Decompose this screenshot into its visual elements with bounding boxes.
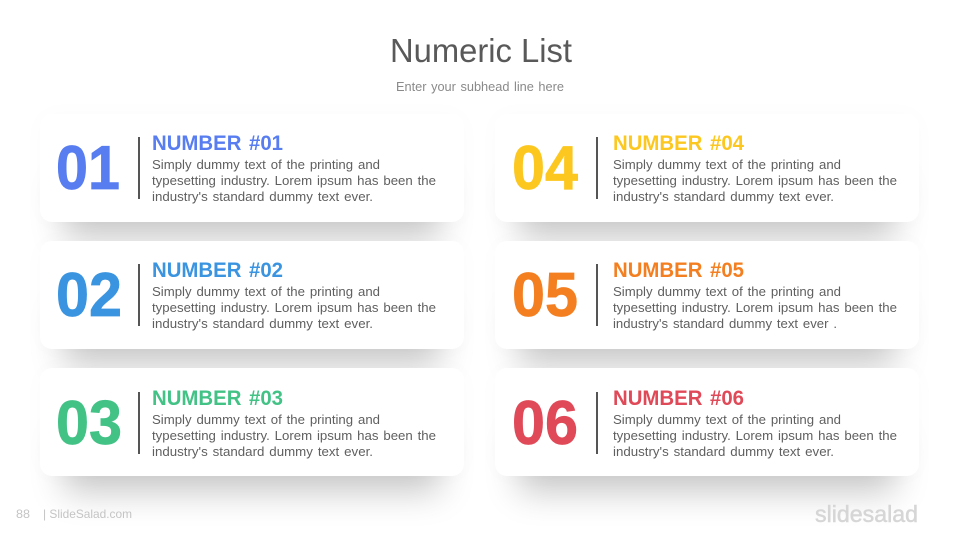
card background 6 [495, 368, 919, 476]
divider 01 [138, 137, 140, 199]
footer source: | SlideSalad.com [43, 507, 132, 521]
logo wordmark: slidesalad [815, 501, 918, 527]
card background 4 [495, 114, 919, 222]
panel: number 05 [512, 259, 897, 331]
body text 01: industry's standard dummy text ever. [152, 189, 373, 204]
subhead: Enter your subhead line here [396, 79, 564, 94]
panel: number 01 [56, 132, 436, 204]
body text 02: Simply dummy text of the printing and [152, 284, 380, 299]
body text 04: Simply dummy text of the printing and [613, 157, 841, 172]
body text 02 [152, 284, 436, 331]
body text 01 [152, 157, 436, 204]
card background 3 [40, 368, 464, 476]
heading 05: NUMBER #05 [613, 259, 744, 282]
divider 02 [138, 264, 140, 326]
body text 01: typesetting industry. Lorem ipsum has been the [152, 173, 436, 188]
body text 05: typesetting industry. Lorem ipsum has been the [613, 300, 897, 315]
card background 1 [40, 114, 464, 222]
numeral 05: 05 [512, 261, 578, 330]
body text 03: Simply dummy text of the printing and [152, 412, 380, 427]
panel: number 04 [512, 132, 897, 204]
divider 05 [596, 264, 598, 326]
heading 01: NUMBER #01 [152, 132, 283, 155]
panel: number 03 [56, 387, 436, 459]
body text 05: industry's standard dummy text ever . [613, 316, 837, 331]
divider 06 [596, 392, 598, 454]
numeral 06: 06 [512, 389, 578, 458]
body text 01: Simply dummy text of the printing and [152, 157, 380, 172]
body text 06 [613, 412, 897, 459]
body text 03 [152, 412, 436, 459]
body text 06: typesetting industry. Lorem ipsum has been the [613, 428, 897, 443]
title: Numeric List [390, 32, 572, 69]
body text 06: industry's standard dummy text ever. [613, 444, 834, 459]
body text 03: typesetting industry. Lorem ipsum has been the [152, 428, 436, 443]
panel: number 06 [512, 387, 897, 459]
body text 05: Simply dummy text of the printing and [613, 284, 841, 299]
numeral 01: 01 [56, 134, 120, 203]
body text 02: industry's standard dummy text ever. [152, 316, 373, 331]
panel: number 02 [56, 259, 436, 331]
body text 06: Simply dummy text of the printing and [613, 412, 841, 427]
numeral 03: 03 [56, 389, 122, 458]
heading 03: NUMBER #03 [152, 387, 283, 410]
heading 02: NUMBER #02 [152, 259, 283, 282]
numeral 04: 04 [512, 134, 578, 203]
divider 03 [138, 392, 140, 454]
body text 03: industry's standard dummy text ever. [152, 444, 373, 459]
body text 05 [613, 284, 897, 331]
divider 04 [596, 137, 598, 199]
card background 2 [40, 241, 464, 349]
heading 06: NUMBER #06 [613, 387, 744, 410]
numeral 02: 02 [56, 261, 122, 330]
body text 02: typesetting industry. Lorem ipsum has been the [152, 300, 436, 315]
heading 04: NUMBER #04 [613, 132, 744, 155]
page number: 88 [16, 507, 30, 521]
body text 04: industry's standard dummy text ever. [613, 189, 834, 204]
body text 04 [613, 157, 897, 204]
card background 5 [495, 241, 919, 349]
body text 04: typesetting industry. Lorem ipsum has been the [613, 173, 897, 188]
